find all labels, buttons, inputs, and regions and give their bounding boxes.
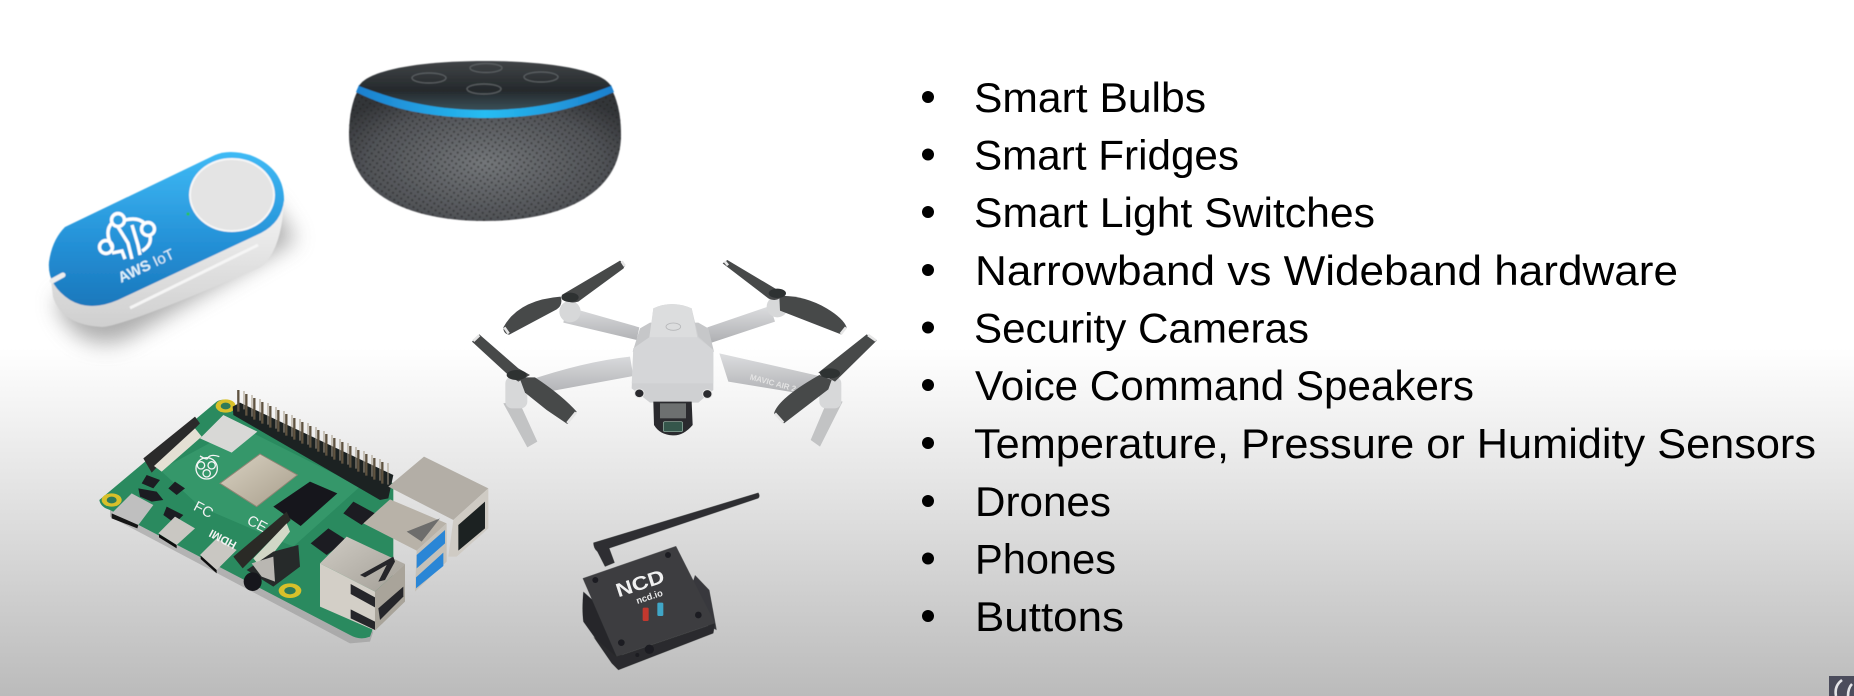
cpu heat spreader: [220, 454, 297, 507]
item: smart bulbs: Smart Bulbs: [974, 74, 1206, 121]
device: ncd wireless sensor: [582, 493, 759, 670]
item: smart light switches: Smart Light Switches: [974, 189, 1375, 236]
drone front sensors: [635, 389, 712, 398]
sensor screws: [592, 552, 702, 657]
gpio header base: [233, 403, 393, 500]
blue usb ports: [363, 499, 447, 551]
green pcb: [99, 400, 393, 638]
bullet list: [922, 74, 1816, 640]
drone camera gimbal: [653, 402, 693, 435]
button silver body: [49, 200, 284, 327]
camera connector: [143, 417, 200, 473]
black usb ports: [320, 537, 405, 592]
fcc mark: FC: [191, 499, 216, 522]
small ic chips: [138, 475, 375, 555]
speaker top dome: [359, 61, 611, 110]
speaker fabric body: [349, 92, 621, 221]
ncd.io label: ncd.io: [635, 588, 664, 606]
ncd logo: NCD: [613, 567, 667, 602]
item: security cameras: Security Cameras: [974, 304, 1309, 352]
speaker top buttons: [412, 64, 558, 94]
drone side shells: [633, 323, 714, 352]
device: drone: [472, 260, 877, 447]
drone propeller hubs: [507, 289, 840, 380]
board shadow: [110, 503, 373, 643]
hdmi marking: HDMI: [208, 526, 239, 551]
aws iot label: AWS IoT: [116, 246, 177, 287]
raspberry logo: [196, 455, 219, 479]
sensor left bracket: [582, 592, 630, 668]
drone camera body: [660, 403, 686, 418]
sensor antenna: [593, 493, 759, 567]
item: voice command speakers: Voice Command Speakers: [975, 362, 1474, 409]
usb dark openings: [351, 557, 403, 630]
button shadow: [55, 200, 296, 343]
drone body shading: [632, 337, 713, 383]
drone lower arms: [525, 353, 825, 397]
audio jack: [247, 545, 300, 587]
drone top shell: [649, 304, 697, 337]
aws iot logo: [100, 214, 154, 259]
sensor box front: [593, 623, 715, 670]
white press button: [190, 159, 274, 231]
drone propellers: [472, 260, 877, 424]
drone upper arms: [563, 306, 775, 343]
drone prop tips: [473, 261, 876, 423]
item: narrowband vs wideband hardware: Narrowband vs Wideband hardware: [975, 247, 1678, 294]
status led: [186, 212, 190, 216]
button blue face: [49, 152, 284, 306]
side slot: [52, 275, 63, 281]
usb-c power port: [112, 493, 153, 525]
item: drones: Drones: [975, 478, 1111, 525]
device: smart speaker: [349, 61, 621, 221]
wifi module: [200, 415, 257, 453]
display connector: [233, 512, 291, 568]
temperature icon: [643, 608, 649, 621]
item: temperature, pressure or humidity sensors: Temperature, Pressure or Humidity Sensors: [974, 420, 1816, 467]
drone legs: [503, 398, 843, 447]
ethernet port: [388, 457, 488, 520]
speaker blue light ring: [356, 85, 614, 118]
speaker mesh texture: [349, 92, 621, 221]
drone model label: MAVIC AIR 2: [749, 373, 798, 394]
sensor box top: [583, 546, 715, 657]
mounting holes: [102, 399, 301, 598]
drone motors: [505, 296, 841, 408]
item: buttons: Buttons: [975, 593, 1124, 640]
device: AWS IoT button: [49, 152, 284, 327]
item: phones: Phones: [975, 536, 1116, 582]
item: smart fridges: Smart Fridges: [974, 132, 1239, 178]
gpio back pins: [244, 391, 388, 485]
blue usb dark inset: [407, 518, 440, 542]
pcb lighter region: [160, 427, 360, 547]
ce mark: CE: [244, 513, 270, 537]
drone top emblem: [666, 323, 681, 330]
humidity icon: [657, 603, 663, 616]
button groove: [130, 245, 258, 308]
micro hdmi ports: [158, 517, 237, 570]
ram chip: [273, 482, 337, 526]
drone body: [632, 304, 713, 403]
drone camera lens: [663, 422, 683, 432]
corner logo badge: [1829, 676, 1854, 696]
device: raspberry pi board: [99, 390, 488, 643]
gpio pins: [238, 390, 382, 484]
sensor right bracket: [683, 575, 717, 630]
